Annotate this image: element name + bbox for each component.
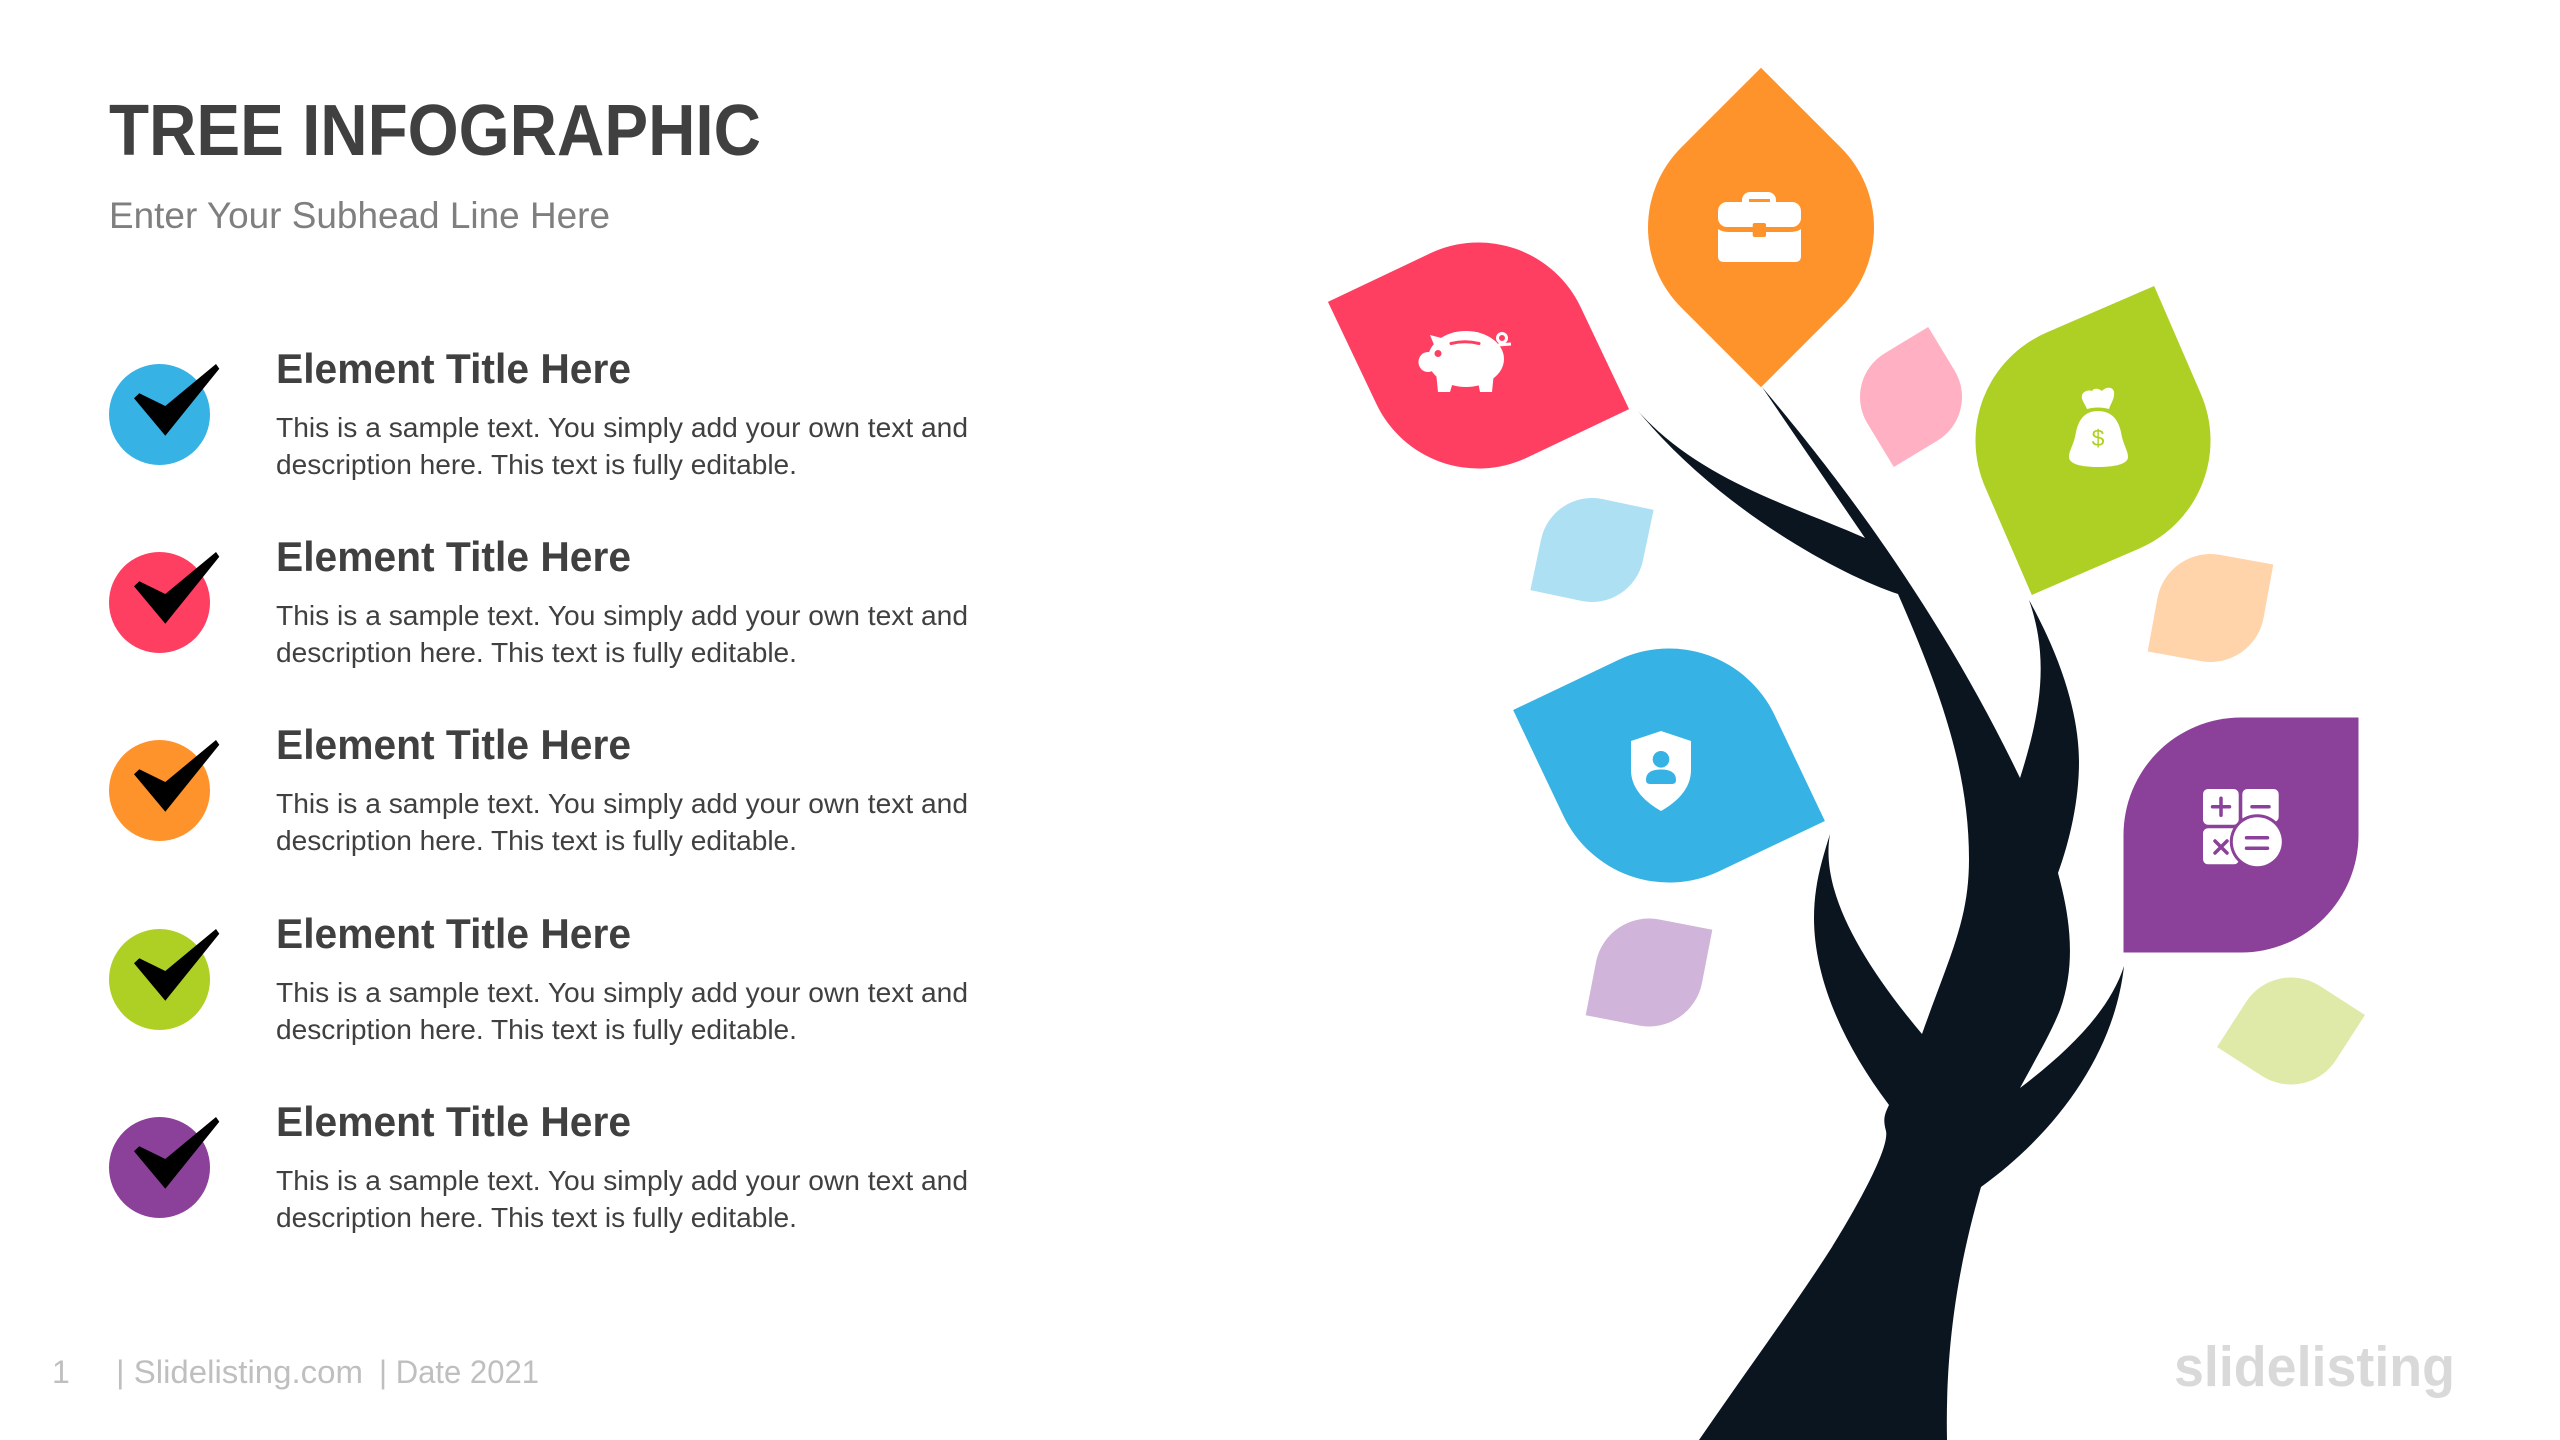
item text: description here. This text is fully editable.	[276, 825, 797, 856]
check icon: blue	[109, 364, 219, 465]
icon: piggy bank	[1418, 331, 1511, 392]
check icon: orange	[109, 740, 219, 841]
item text	[276, 977, 968, 1045]
subtitle: Enter Your Subhead Line Here	[109, 195, 610, 236]
item text	[276, 788, 968, 856]
icon: briefcase	[1718, 192, 1801, 262]
icon: money bag	[2069, 388, 2128, 467]
footer text: | Slidelisting.com	[116, 1354, 363, 1390]
list item 1	[109, 345, 968, 480]
item text	[276, 412, 968, 480]
list item 5	[109, 1098, 968, 1233]
small leaf: light purple	[1586, 909, 1712, 1036]
item text: This is a sample text. You simply add your own text and	[276, 977, 968, 1008]
icon: user shield	[1631, 731, 1691, 811]
item text: This is a sample text. You simply add your own text and	[276, 788, 968, 819]
item heading: Element Title Here	[276, 533, 631, 580]
small leaf: light blue	[1530, 488, 1654, 612]
watermark logo: slidelisting	[2174, 1335, 2455, 1399]
item text: description here. This text is fully editable.	[276, 1202, 797, 1233]
list item 2	[109, 533, 968, 668]
item text: description here. This text is fully editable.	[276, 637, 797, 668]
small leaf: light pink	[1841, 327, 1981, 467]
item heading: Element Title Here	[276, 345, 631, 392]
check icon: green	[109, 929, 219, 1030]
item text: description here. This text is fully editable.	[276, 449, 797, 480]
small leaf: light green	[2217, 957, 2365, 1105]
item heading: Element Title Here	[276, 1098, 631, 1145]
leaf: red piggy bank	[1328, 205, 1629, 506]
list item 3	[109, 721, 968, 856]
item text: This is a sample text. You simply add your own text and	[276, 1165, 968, 1196]
item text: This is a sample text. You simply add your own text and	[276, 600, 968, 631]
leaf: blue shield	[1513, 610, 1825, 921]
icon: calculator	[2203, 789, 2285, 869]
item text	[276, 1165, 968, 1233]
icon: money bag: $	[2092, 425, 2105, 451]
footer text: | Date 2021	[379, 1354, 539, 1390]
check icon: red	[109, 552, 219, 653]
title: TREE INFOGRAPHIC	[109, 91, 761, 171]
leaf: orange briefcase	[1601, 68, 1921, 387]
footer page number: 1	[52, 1354, 70, 1390]
leaf: purple calculator	[2124, 718, 2358, 952]
small leaf: peach	[2148, 545, 2273, 671]
check icon: purple	[109, 1117, 219, 1218]
item heading: Element Title Here	[276, 910, 631, 957]
tree silhouette	[1638, 387, 2124, 1440]
item text: This is a sample text. You simply add your own text and	[276, 412, 968, 443]
item text	[276, 600, 968, 668]
item text: description here. This text is fully editable.	[276, 1014, 797, 1045]
footer text	[116, 1354, 539, 1390]
leaf: green money bag	[1938, 286, 2248, 595]
list item 4	[109, 910, 968, 1045]
item heading: Element Title Here	[276, 721, 631, 768]
